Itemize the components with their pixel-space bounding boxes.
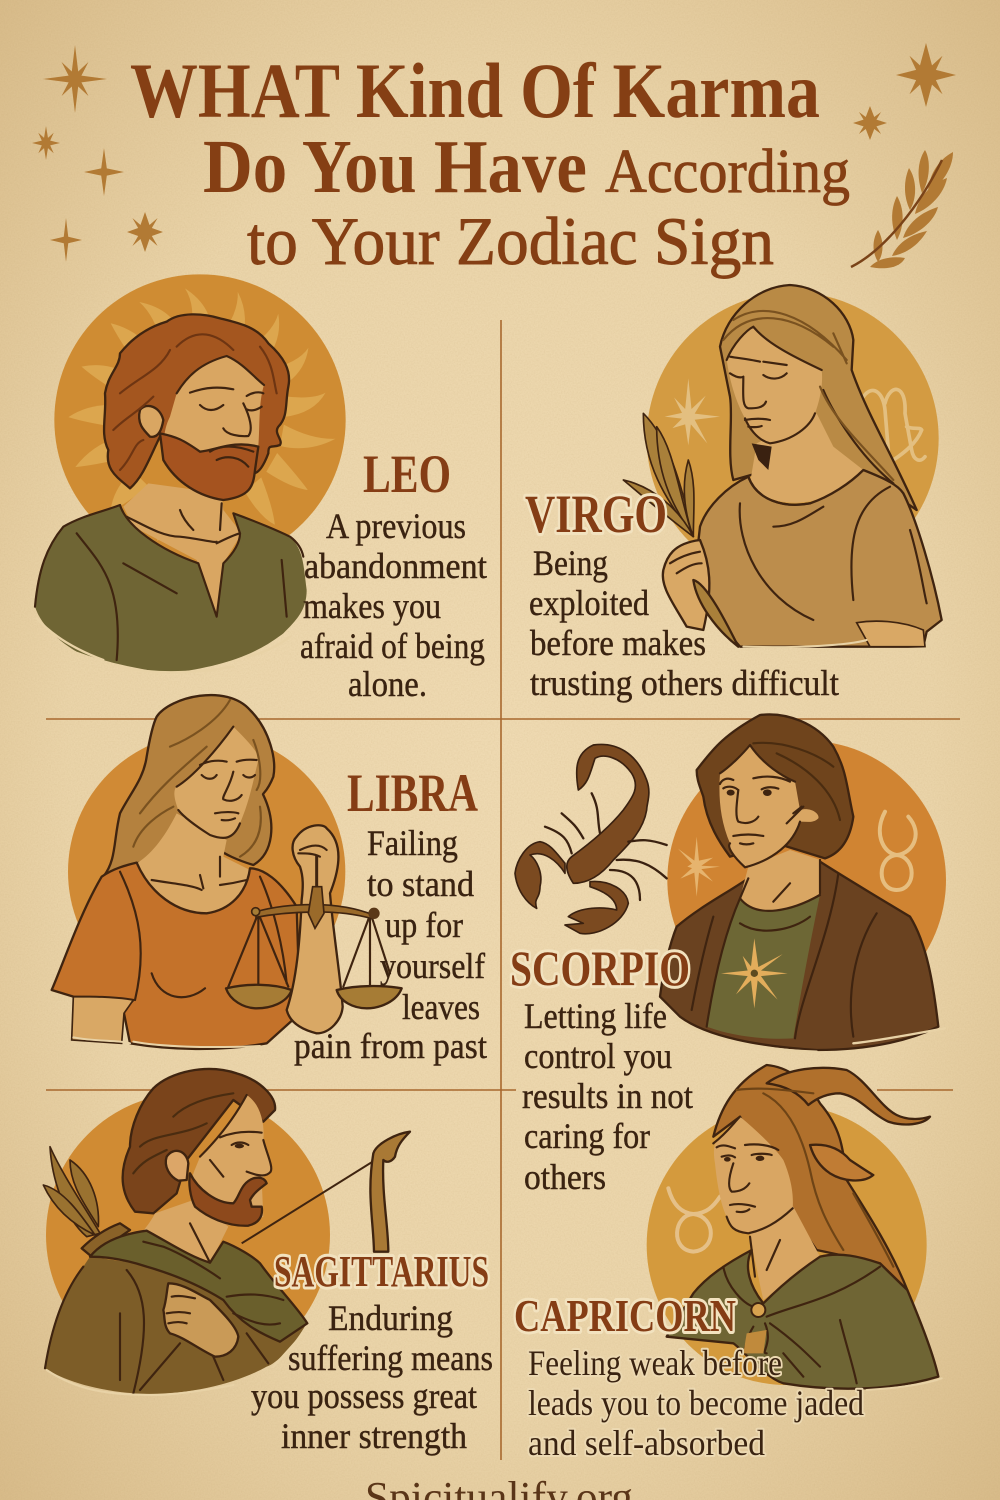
description: leaves bbox=[402, 987, 480, 1027]
grid dividers bbox=[46, 320, 960, 1460]
description bbox=[251, 1298, 493, 1456]
panel: Libra bbox=[52, 695, 487, 1066]
description: up for bbox=[385, 905, 463, 945]
description: Failing bbox=[367, 823, 458, 863]
panel: Capricorn bbox=[514, 1065, 942, 1463]
description: Letting life bbox=[524, 996, 667, 1036]
illustration: Capricorn figure with horn bbox=[647, 1065, 942, 1390]
description: leads you to become jaded bbox=[528, 1383, 864, 1423]
description: alone. bbox=[348, 664, 427, 704]
description bbox=[300, 506, 487, 704]
description: to stand bbox=[367, 864, 474, 904]
icon: laurel sprig bbox=[851, 150, 953, 268]
description bbox=[529, 543, 839, 703]
description: and self-absorbed bbox=[528, 1423, 765, 1463]
panel: Sagittarius bbox=[43, 1069, 493, 1456]
illustration: Leo man with sun halo bbox=[35, 274, 346, 673]
description: suffering means bbox=[288, 1338, 493, 1378]
description: Feeling weak before bbox=[528, 1343, 782, 1383]
description: abandonment bbox=[304, 546, 487, 586]
title bbox=[130, 47, 850, 279]
illustration: Scorpio man with scorpion bbox=[515, 714, 946, 1052]
description: you possess great bbox=[251, 1376, 477, 1416]
title: to Your Zodiac Sign bbox=[247, 203, 774, 279]
description bbox=[294, 823, 487, 1066]
heading: VIRGO bbox=[525, 484, 667, 544]
description: exploited bbox=[529, 583, 649, 623]
heading: SAGITTARIUS bbox=[274, 1247, 489, 1296]
description: afraid of being bbox=[300, 626, 485, 666]
panel: Leo bbox=[35, 274, 487, 704]
panel: Scorpio bbox=[510, 714, 946, 1197]
description: pain from past bbox=[294, 1026, 487, 1066]
heading: LIBRA bbox=[347, 763, 478, 823]
description: Being bbox=[533, 543, 608, 583]
illustration: Libra woman holding scales bbox=[52, 695, 402, 1049]
illustration: Virgo woman with wheat bbox=[623, 285, 942, 650]
panel: Virgo bbox=[525, 285, 942, 703]
illustration: Sagittarius archer bbox=[43, 1069, 410, 1395]
description: makes you bbox=[303, 586, 441, 626]
description: caring for bbox=[524, 1116, 650, 1156]
description: trusting others difficult bbox=[530, 663, 839, 703]
icon: scorpion bbox=[515, 744, 667, 934]
description: before makes bbox=[530, 623, 706, 663]
description bbox=[522, 996, 693, 1197]
description: Enduring bbox=[328, 1298, 453, 1338]
description: control you bbox=[524, 1036, 672, 1076]
title: According bbox=[605, 138, 850, 206]
description bbox=[528, 1343, 864, 1463]
description: results in not bbox=[522, 1076, 693, 1116]
description: A previous bbox=[326, 506, 466, 546]
title: Do You Have bbox=[203, 125, 587, 209]
description: others bbox=[524, 1157, 606, 1197]
description: yourself bbox=[380, 946, 485, 986]
heading: SCORPIO bbox=[510, 940, 690, 996]
heading: LEO bbox=[363, 444, 451, 504]
decorative stars left bbox=[32, 45, 163, 262]
heading: CAPRICORN bbox=[514, 1290, 736, 1341]
title: WHAT Kind Of Karma bbox=[130, 47, 820, 134]
description: inner strength bbox=[281, 1416, 467, 1456]
decorative stars right bbox=[853, 43, 956, 140]
